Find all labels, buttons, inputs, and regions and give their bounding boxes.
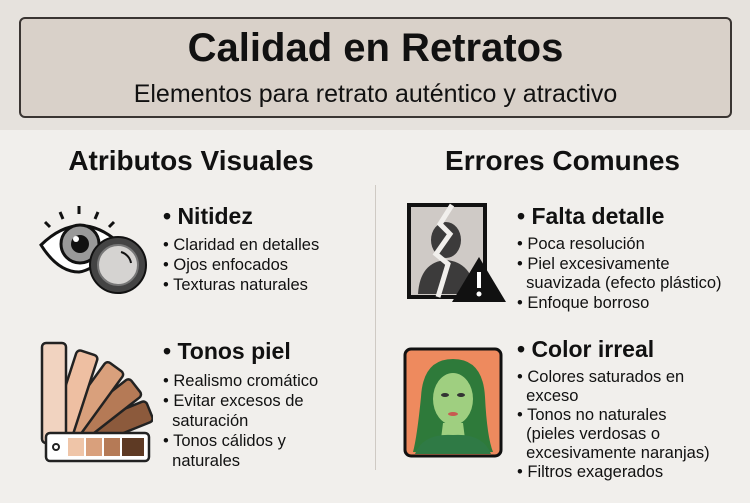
item: Falta detalle: • Piel excesivamente [517,254,670,272]
item: Falta detalle: suavizada (efecto plástico) [526,274,722,292]
item: Tonos piel: • Tonos piel [163,338,291,364]
item: Color irreal: excesivamente naranjas) [526,444,710,462]
item: Color irreal [517,336,710,481]
item: Nitidez: • Nitidez [163,203,253,229]
item: Color irreal: • Colores saturados en [517,368,684,386]
item: Tonos piel: saturación [172,412,248,430]
heading: Atributos Visuales: Atributos Visuales [68,145,314,176]
header box [19,17,732,118]
item: Falta detalle: • Falta detalle [517,203,664,229]
icon: blurry broken portrait with warning [407,203,506,302]
icon: green-skinned portrait [404,348,502,458]
item: Tonos piel [163,338,318,470]
item: Tonos piel: • Realismo cromático [163,372,318,390]
item: Nitidez: • Ojos enfocados [163,256,288,274]
item: Nitidez: • Claridad en detalles [163,236,319,254]
item: Color irreal: exceso [526,387,578,405]
item: Falta detalle: • Poca resolución [517,235,645,253]
item: Falta detalle: • Enfoque borroso [517,294,649,312]
title: Calidad en Retratos [188,26,563,70]
item: Color irreal: (pieles verdosas o [526,425,660,443]
subtitle: Elementos para retrato auténtico y atractivo [134,80,617,108]
icon: skin tone swatches [40,342,153,462]
heading: Errores Comunes: Errores Comunes [445,145,680,176]
item: Color irreal: • Tonos no naturales [517,406,666,424]
item: Color irreal: • Color irreal [517,336,654,362]
item: Tonos piel: • Evitar excesos de [163,392,304,410]
item: Nitidez: • Texturas naturales [163,276,308,294]
icon: eye with lens [39,206,147,294]
item: Color irreal: • Filtros exagerados [517,463,663,481]
item: Tonos piel: naturales [172,452,240,470]
item: Nitidez [163,203,319,294]
item: Tonos piel: • Tonos cálidos y [163,432,286,450]
item: Falta detalle [517,203,722,312]
